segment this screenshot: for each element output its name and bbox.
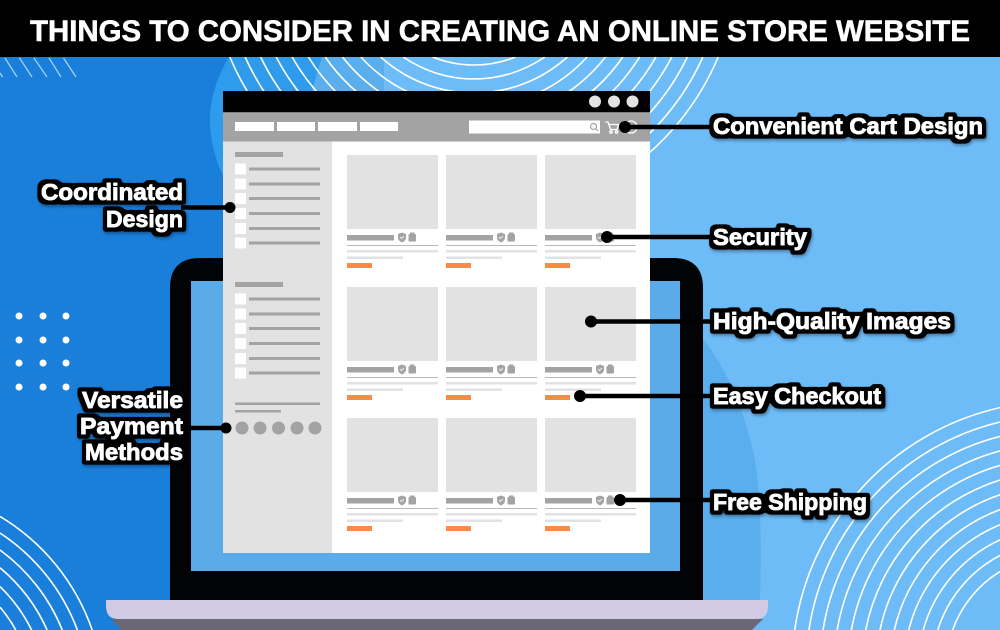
callout: Convenient Cart Design: Convenient Cart Design bbox=[713, 113, 983, 139]
search box bbox=[469, 120, 600, 134]
background: dark blue under laptop bbox=[106, 258, 226, 630]
callout: Security: Security bbox=[713, 224, 807, 250]
callout: Versatile Payment Methods: Methods bbox=[85, 439, 183, 465]
laptop screen bbox=[191, 281, 680, 571]
browser title bar bbox=[223, 91, 650, 112]
laptop base shadow bbox=[111, 619, 763, 630]
callout: Versatile Payment Methods: Payment bbox=[80, 413, 183, 439]
icon: cart bbox=[606, 122, 618, 133]
background blob: mid blue bbox=[210, 57, 330, 178]
browser window bbox=[223, 91, 650, 553]
icon: account bbox=[625, 121, 637, 133]
callout: Security bbox=[601, 224, 807, 250]
filter group one bbox=[235, 152, 320, 248]
site navigation bar bbox=[223, 113, 650, 142]
callout: High-Quality Images: High-Quality Images bbox=[713, 308, 951, 334]
background: dark blue left side bbox=[0, 57, 320, 630]
decorative rings: bottom right bbox=[795, 408, 1000, 630]
laptop bbox=[106, 258, 768, 630]
callout: High-Quality Images bbox=[585, 308, 951, 334]
background blob: soft blue top bbox=[312, 57, 384, 91]
laptop body bbox=[170, 258, 703, 600]
callout: Coordinated Design: Coordinated bbox=[41, 179, 183, 205]
sidebar bbox=[223, 142, 332, 553]
payment methods bbox=[235, 402, 322, 434]
callout: Coordinated Design bbox=[41, 179, 236, 232]
product grid bbox=[347, 155, 636, 531]
callout: Easy Checkout bbox=[574, 383, 881, 409]
callout: Coordinated Design: Design bbox=[106, 206, 183, 232]
title banner bbox=[0, 0, 1000, 57]
callout: Versatile Payment Methods: Versatile bbox=[82, 387, 183, 413]
laptop base bbox=[106, 600, 768, 619]
callout: Versatile Payment Methods bbox=[80, 387, 232, 465]
filter group two bbox=[235, 282, 320, 378]
decorative hatch lines: top left bbox=[0, 58, 76, 77]
callout: Free Shipping: Free Shipping bbox=[713, 489, 867, 515]
decorative rings: bottom left bbox=[0, 516, 92, 630]
callout: Easy Checkout: Easy Checkout bbox=[713, 383, 881, 409]
decorative dot grid bbox=[16, 312, 70, 390]
background blob: soft blue right bbox=[690, 335, 761, 600]
title: THINGS TO CONSIDER IN CREATING AN ONLINE STORE WEBSITE bbox=[30, 15, 970, 48]
decorative rings: top centre bbox=[230, 57, 718, 219]
callout: Free Shipping bbox=[614, 489, 867, 515]
